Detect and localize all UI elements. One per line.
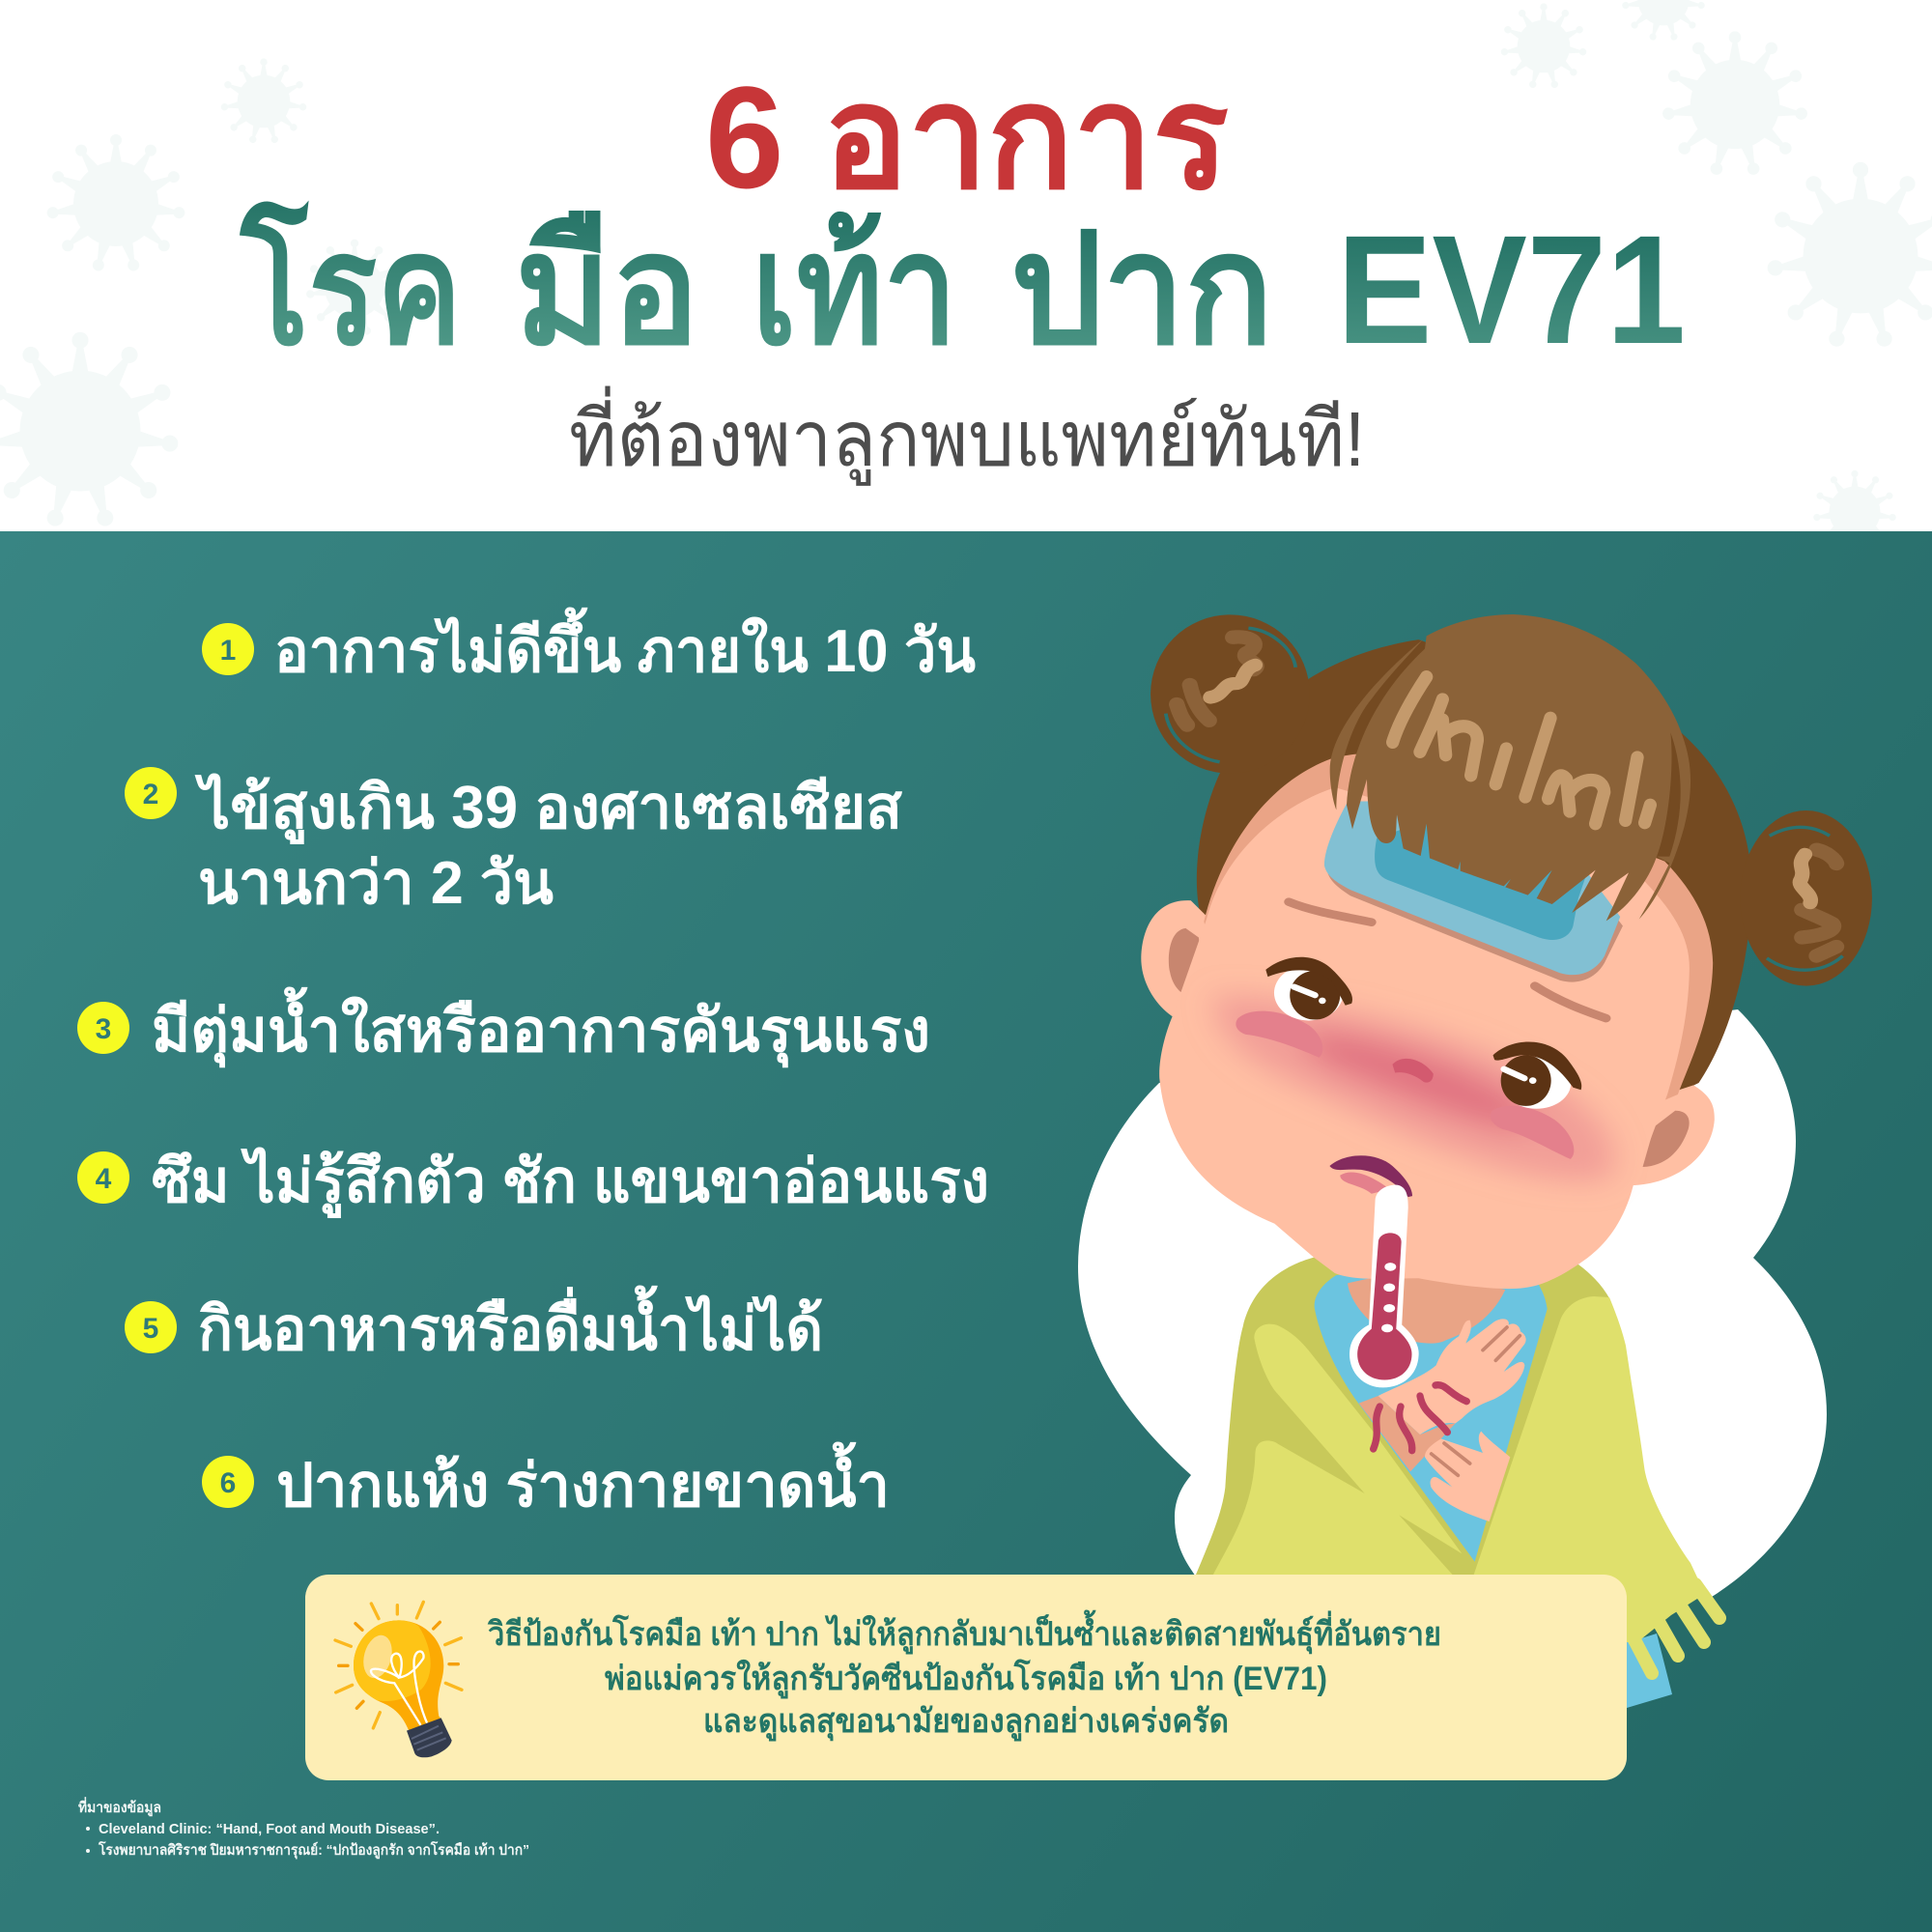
blanket light folds [1212, 1324, 1462, 1577]
symptom 6: 6 [220, 1467, 236, 1499]
callout text: และดูแลสุขอนามัยของลูกอย่างเคร่งครัด [703, 1703, 1229, 1742]
blanket right panel [1473, 1296, 1705, 1642]
sources: Cleveland Clinic: “Hand, Foot and Mouth Disease”. [99, 1821, 440, 1837]
symptom 5: กินอาหารหรือดื่มน้ำไม่ได้ [198, 1285, 823, 1363]
right eye [1493, 1042, 1581, 1109]
cooling patch [1326, 809, 1623, 982]
symptom 2: ไข้สูงเกิน 39 องศาเซลเซียส [194, 773, 902, 844]
sources: โรงพยาบาลศิริราช ปิยมหาราชการุณย์: “ปกป้องลูกรัก จากโรคมือ เท้า ปาก” [98, 1840, 529, 1860]
symptom 2 [125, 767, 902, 917]
symptom 4: 4 [96, 1163, 112, 1195]
back hair [1197, 639, 1751, 1094]
title line 2: มือ [515, 203, 699, 376]
title line 2: โรค [239, 200, 462, 376]
ears [1141, 900, 1211, 1017]
hair buns [1151, 614, 1310, 774]
face [1204, 753, 1713, 1134]
brows [1289, 902, 1606, 1018]
nose [1392, 1059, 1434, 1083]
body and blanket [1195, 1258, 1610, 1577]
flushed blush [1214, 995, 1614, 1181]
symptom list [77, 607, 989, 1520]
subtitle: ที่ต้องพาลูกพบแพทย์ทันที! [569, 386, 1365, 486]
symptom 1: อาการไม่ดีขึ้น ภายใน 10 วัน [274, 607, 976, 685]
symptom 1: 1 [220, 635, 236, 667]
callout text: วิธีป้องกันโรคมือ เท้า ปาก ไม่ให้ลูกกลับมาเป็นซ้ำและติดสายพันธุ์ที่อันตราย [487, 1609, 1441, 1655]
callout text: พ่อแม่ควรให้ลูกรับวัคซีนป้องกันโรคมือ เท้า ปาก (EV71) [605, 1659, 1327, 1699]
sources [78, 1797, 529, 1860]
icon: light bulb [335, 1602, 462, 1757]
illustration: sick child [1078, 614, 1872, 1708]
sources: ที่มาของข้อมูล [78, 1797, 161, 1817]
symptom 3: มีตุ่มน้ำใสหรืออาการคันรุนแรง [152, 986, 930, 1067]
symptom 5: 5 [143, 1313, 158, 1345]
title [239, 56, 1686, 376]
title line 2: EV71 [1337, 203, 1686, 376]
title line 2: เท้า [752, 203, 957, 376]
symptom 6: ปากแห้ง ร่างกายขาดน้ำ [276, 1441, 890, 1520]
blanket tail and fringe [1623, 1584, 1719, 1708]
teal panel [0, 531, 1932, 1932]
thermometer [1350, 1185, 1419, 1387]
white cloud backdrop [1078, 1009, 1827, 1623]
arms and hands [1359, 1396, 1456, 1471]
symptom 2: นานกว่า 2 วัน [198, 850, 554, 917]
front hair [1330, 614, 1690, 921]
symptom 3: 3 [96, 1013, 111, 1045]
callout text [487, 1609, 1441, 1742]
symptom 2: 2 [143, 779, 158, 810]
callout: prevention tip [305, 1575, 1627, 1780]
title line 2: ปาก [1010, 203, 1273, 376]
mouth [1340, 1172, 1390, 1194]
rash marks [1374, 1385, 1466, 1451]
title line 1: 6 อาการ [705, 56, 1229, 218]
left eye [1265, 957, 1352, 1020]
title line 2 [239, 200, 1686, 376]
symptom 4: ซึม ไม่รู้สึกตัว ชัก แขนขาอ่อนแรง [152, 1147, 989, 1218]
head [1141, 614, 1872, 1289]
